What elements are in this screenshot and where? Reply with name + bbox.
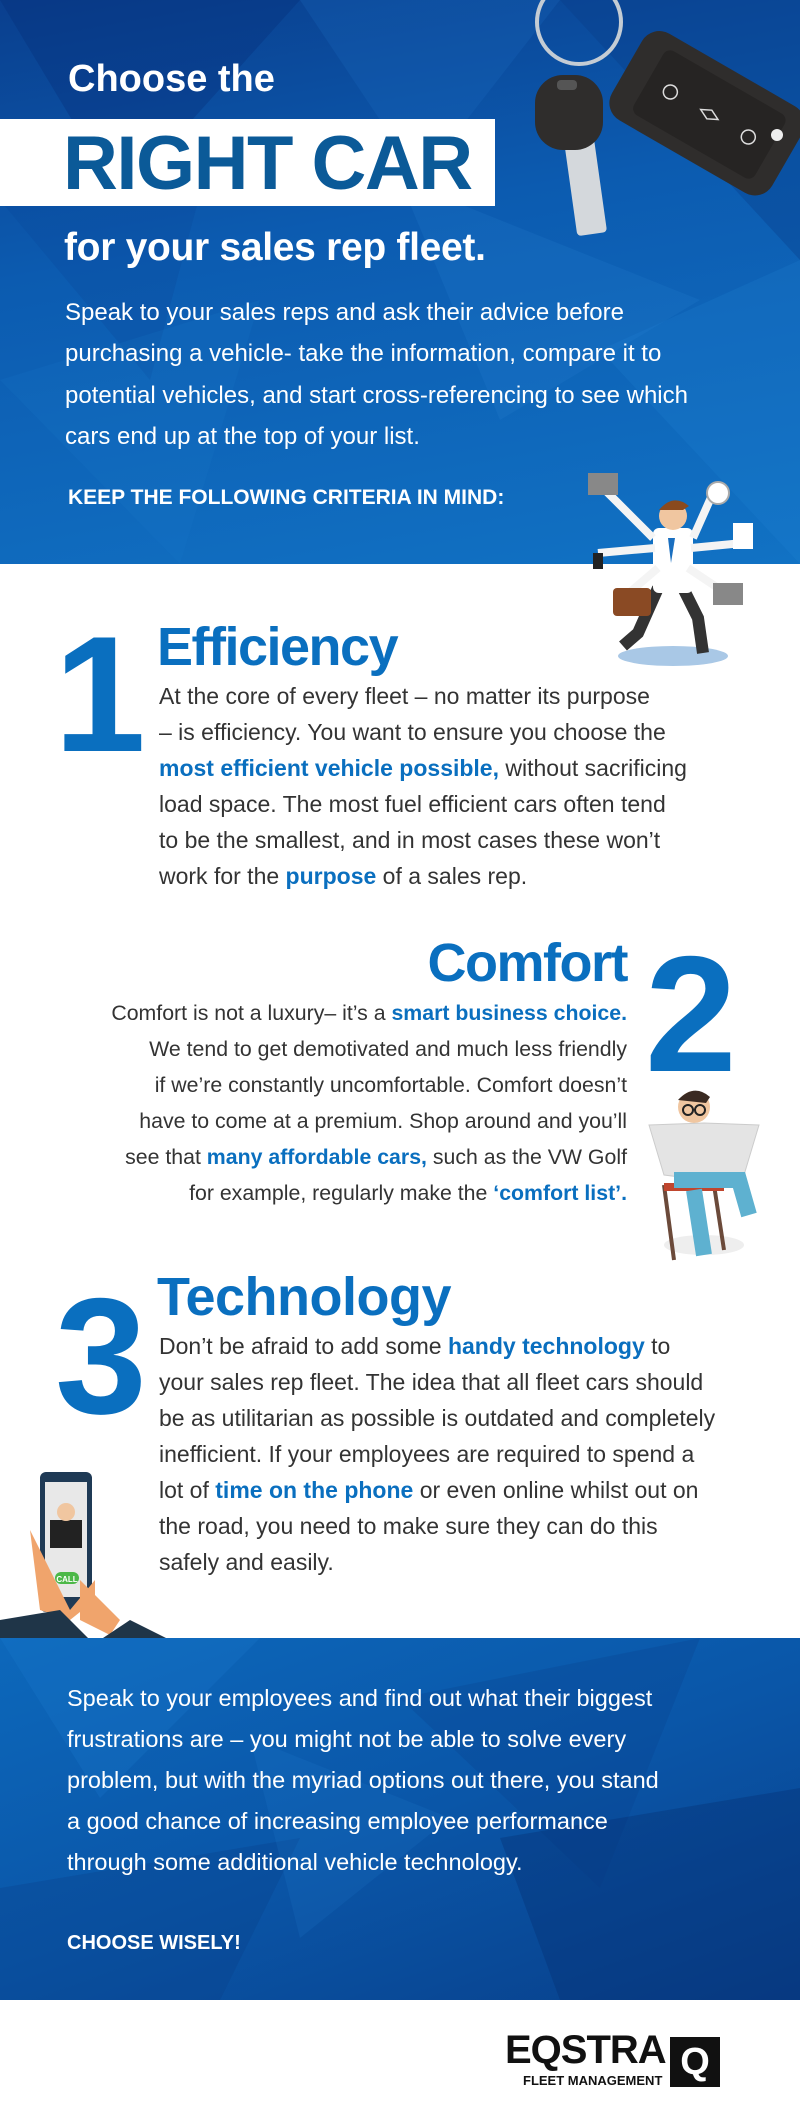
text block: comfort body — [111, 1001, 628, 1205]
text block: closing paragraph: Speak to your employees and find out what their biggest — [67, 1685, 652, 1711]
icon: car keys — [535, 0, 800, 236]
text block: comfort body: have to come at a premium. Shop around and you’ll — [139, 1109, 627, 1133]
number: 3: 3 — [55, 1264, 147, 1448]
text block: technology body: be as utilitarian as possible is outdated and completely — [159, 1405, 715, 1431]
icon: hand holding phone — [0, 1472, 166, 1638]
heading: Technology: Technology — [157, 1267, 451, 1327]
text block: intro paragraph — [65, 299, 688, 450]
text block: technology body: inefficient. If your employees are required to spend a — [159, 1441, 694, 1467]
text block: technology body: Don’t be afraid to add some handy technology to — [159, 1333, 670, 1359]
text block: intro paragraph: purchasing a vehicle- take the information, compare it to — [65, 340, 661, 367]
text block: comfort body: for example, regularly make the ‘comfort list’. — [189, 1181, 627, 1205]
icon: man reading newspaper — [648, 1090, 760, 1260]
number: 1: 1 — [54, 602, 146, 786]
text block: efficiency body — [159, 683, 687, 889]
text block: efficiency body: load space. The most fuel efficient cars often tend — [159, 791, 666, 817]
panel: efficiency — [54, 602, 687, 889]
text block: closing paragraph: problem, but with the myriad options out there, you stand — [67, 1767, 659, 1793]
logo: Eqstra fleet management: Q — [680, 2041, 710, 2083]
panel: header background — [0, 0, 800, 564]
heading: choose wisely: CHOOSE WISELY! — [67, 1932, 241, 1954]
text block: closing paragraph: frustrations are – you might not be able to solve every — [67, 1726, 626, 1752]
text block: closing paragraph: through some additional vehicle technology. — [67, 1849, 522, 1875]
panel: technology — [0, 1264, 715, 1638]
logo: Eqstra fleet management — [505, 2028, 720, 2088]
text block: intro paragraph: potential vehicles, and start cross-referencing to see which — [65, 382, 688, 409]
heading: Efficiency: Efficiency — [157, 617, 397, 677]
text block: intro paragraph: cars end up at the top of your list. — [65, 423, 420, 450]
text block: efficiency body: – is efficiency. You want to ensure you choose the — [159, 719, 666, 745]
text block: technology body — [159, 1333, 715, 1575]
title box: RIGHT CAR: RIGHT CAR — [63, 121, 472, 206]
panel: comfort — [111, 922, 760, 1260]
text block: efficiency body: to be the smallest, and in most cases these won’t — [159, 827, 660, 853]
text block: technology body: lot of time on the phone or even online whilst out on — [159, 1477, 698, 1503]
text block: closing paragraph: a good chance of increasing employee performance — [67, 1808, 608, 1834]
text block: technology body: your sales rep fleet. The idea that all fleet cars should — [159, 1369, 703, 1395]
number: 2: 2 — [645, 922, 737, 1106]
text block: comfort body: We tend to get demotivated and much less friendly — [149, 1037, 627, 1061]
text block: efficiency body: work for the purpose of a sales rep. — [159, 863, 527, 889]
text block: comfort body: see that many affordable cars, such as the VW Golf — [125, 1145, 627, 1169]
text block: efficiency body: most efficient vehicle possible, without sacrificing — [159, 755, 687, 781]
panel: closing background — [0, 1638, 800, 2000]
text block: technology body: the road, you need to make sure they can do this — [159, 1513, 658, 1539]
icon: hand holding phone: CALL — [56, 1575, 78, 1584]
icon: busy businessman — [588, 473, 753, 666]
logo: Eqstra fleet management: EQSTRA — [505, 2028, 666, 2072]
text block: efficiency body: At the core of every fleet – no matter its purpose — [159, 683, 650, 709]
title: Choose the: Choose the — [68, 58, 275, 100]
title: subtitle: for your sales rep fleet. — [64, 226, 486, 269]
logo: Eqstra fleet management: FLEET MANAGEMENT — [523, 2073, 662, 2088]
text block: intro paragraph: Speak to your sales reps and ask their advice before — [65, 299, 624, 326]
text block: comfort body: Comfort is not a luxury– it’s a smart business choice. — [111, 1001, 627, 1025]
text block: technology body: safely and easily. — [159, 1549, 334, 1575]
text block: comfort body: if we’re constantly uncomfortable. Comfort doesn’t — [155, 1073, 627, 1097]
heading: Comfort: Comfort — [428, 933, 627, 993]
heading: criteria: KEEP THE FOLLOWING CRITERIA IN MIND: — [68, 486, 504, 509]
text block: closing paragraph — [67, 1685, 659, 1875]
